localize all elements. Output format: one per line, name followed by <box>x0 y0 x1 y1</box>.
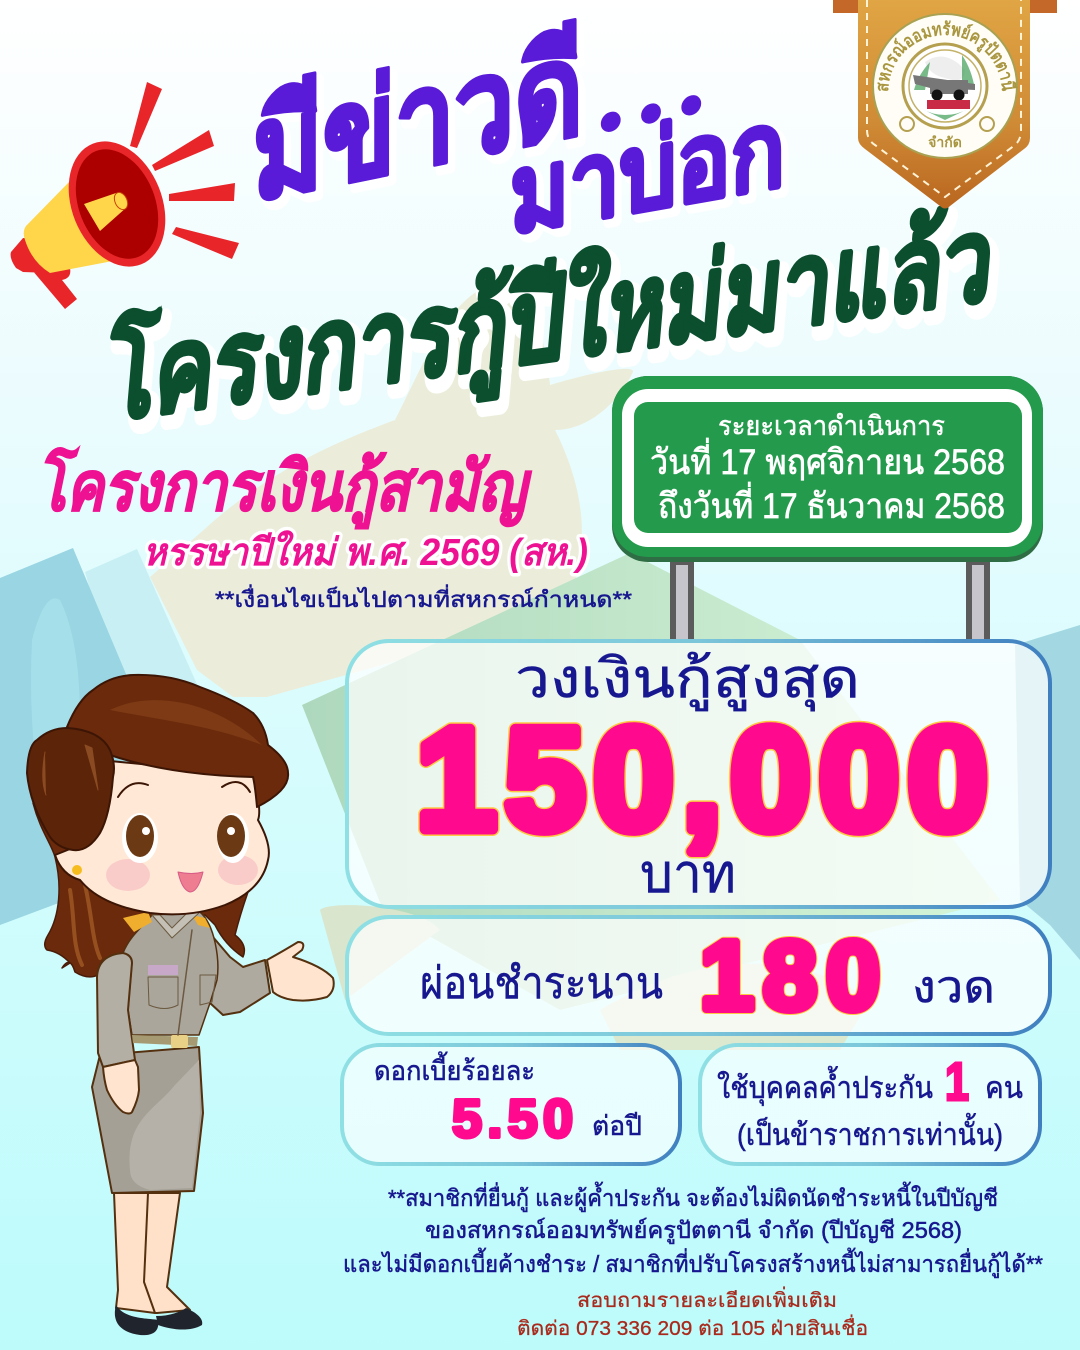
hand right <box>267 942 334 1001</box>
title: good news: มีข่าวดี <box>258 20 588 235</box>
title: second line: มาบ่อก <box>515 92 790 262</box>
panel: guarantor: ใช้บุคคลค้ำประกัน <box>717 1066 933 1107</box>
panel: guarantor: 1 <box>945 1052 969 1112</box>
back hair <box>33 800 255 977</box>
contact <box>517 1286 868 1340</box>
shirt <box>123 912 218 1035</box>
panel: guarantor: (เป็นข้าราชการเท่านั้น) <box>737 1113 1003 1152</box>
unit baht: บาท <box>640 844 736 904</box>
mouth <box>178 872 203 892</box>
panel: interest rate: ดอกเบี้ยร้อยละ <box>374 1051 535 1086</box>
sign posts <box>670 555 990 641</box>
skirt <box>92 1047 203 1193</box>
arm <box>207 930 270 1015</box>
footnote <box>343 1182 1043 1278</box>
subheading: year: หรรษาปีใหม่ พ.ศ. 2569 (สห.) <box>143 530 588 574</box>
maximum loan label: วงเงินกู้สูงสุด <box>515 649 860 712</box>
badge: cooperative logo: สหกรณ์ออมทรัพย์ครูปัตตานี <box>878 20 1018 92</box>
panel: interest rate <box>342 1045 680 1164</box>
amount: 150,000 <box>416 698 988 860</box>
panel: guarantor: คน <box>985 1072 1023 1105</box>
panel: guarantor <box>700 1045 1040 1164</box>
heading: ordinary loan: โครงการเงินกู้สามัญ <box>36 446 532 529</box>
hand left <box>103 1060 139 1114</box>
panel: repayment term: ผ่อนชำระนาน <box>420 959 663 1008</box>
brows <box>118 782 250 797</box>
sign: campaign period: ระยะเวลาดำเนินการ <box>718 411 945 441</box>
panel: repayment term <box>347 917 1050 1034</box>
belt <box>132 1035 198 1046</box>
background decorative shapes <box>0 285 1080 1050</box>
legs <box>114 1193 190 1313</box>
panel: repayment term: 180 <box>700 921 880 1030</box>
illustration: officer woman <box>27 675 334 1335</box>
shoes <box>115 1305 158 1335</box>
title: good news: มีข่าวดี <box>253 14 583 229</box>
sign: campaign period: วันที่ 17 พฤศจิกายน 2568 <box>650 438 1005 482</box>
top hair <box>67 675 288 807</box>
sleeve <box>97 953 135 1067</box>
panel: interest rate: ต่อปี <box>592 1111 642 1141</box>
footnote: **สมาชิกที่ยื่นกู้ และผู้ค้ำประกัน จะต้องไม่ผิดนัดชำระหนี้ในปีบัญชี <box>388 1182 998 1212</box>
collar and insignia <box>123 912 152 932</box>
panel: interest rate: 5.50 <box>452 1089 573 1149</box>
footnote: ของสหกรณ์ออมทรัพย์ครูปัตตานี จำกัด (ปีบัญชี 2568) <box>425 1217 962 1244</box>
sign: campaign period <box>612 376 1043 562</box>
panel: repayment term: 180 <box>700 921 880 1030</box>
contact: ติดต่อ 073 336 209 ต่อ 105 ฝ่ายสินเชื่อ <box>517 1314 868 1340</box>
amount: 150,000 <box>416 698 988 860</box>
sign: campaign period: ถึงวันที่ 17 ธันวาคม 2568 <box>658 482 1005 526</box>
contact: สอบถามรายละเอียดเพิ่มเติม <box>577 1286 837 1312</box>
title: good news: ... <box>597 13 705 157</box>
eyes <box>122 813 158 863</box>
title: second line: มาบ่อก <box>510 87 785 257</box>
hair bun <box>27 728 114 850</box>
badge: cooperative logo: จำกัด <box>928 134 962 150</box>
earring <box>72 865 82 875</box>
icon: megaphone <box>11 82 239 309</box>
panel: maximum loan <box>347 641 1050 907</box>
panel: repayment term: งวด <box>912 963 995 1012</box>
note: conditions: **เงื่อนไขเป็นไปตามที่สหกรณ์กำหนด** <box>215 584 632 612</box>
badge: cooperative logo <box>833 0 1057 208</box>
face <box>55 760 269 914</box>
footnote: และไม่มีดอกเบี้ยค้างชำระ / สมาชิกที่ปรับโครงสร้างหนี้ไม่สามารถยื่นกู้ได้** <box>343 1248 1043 1278</box>
